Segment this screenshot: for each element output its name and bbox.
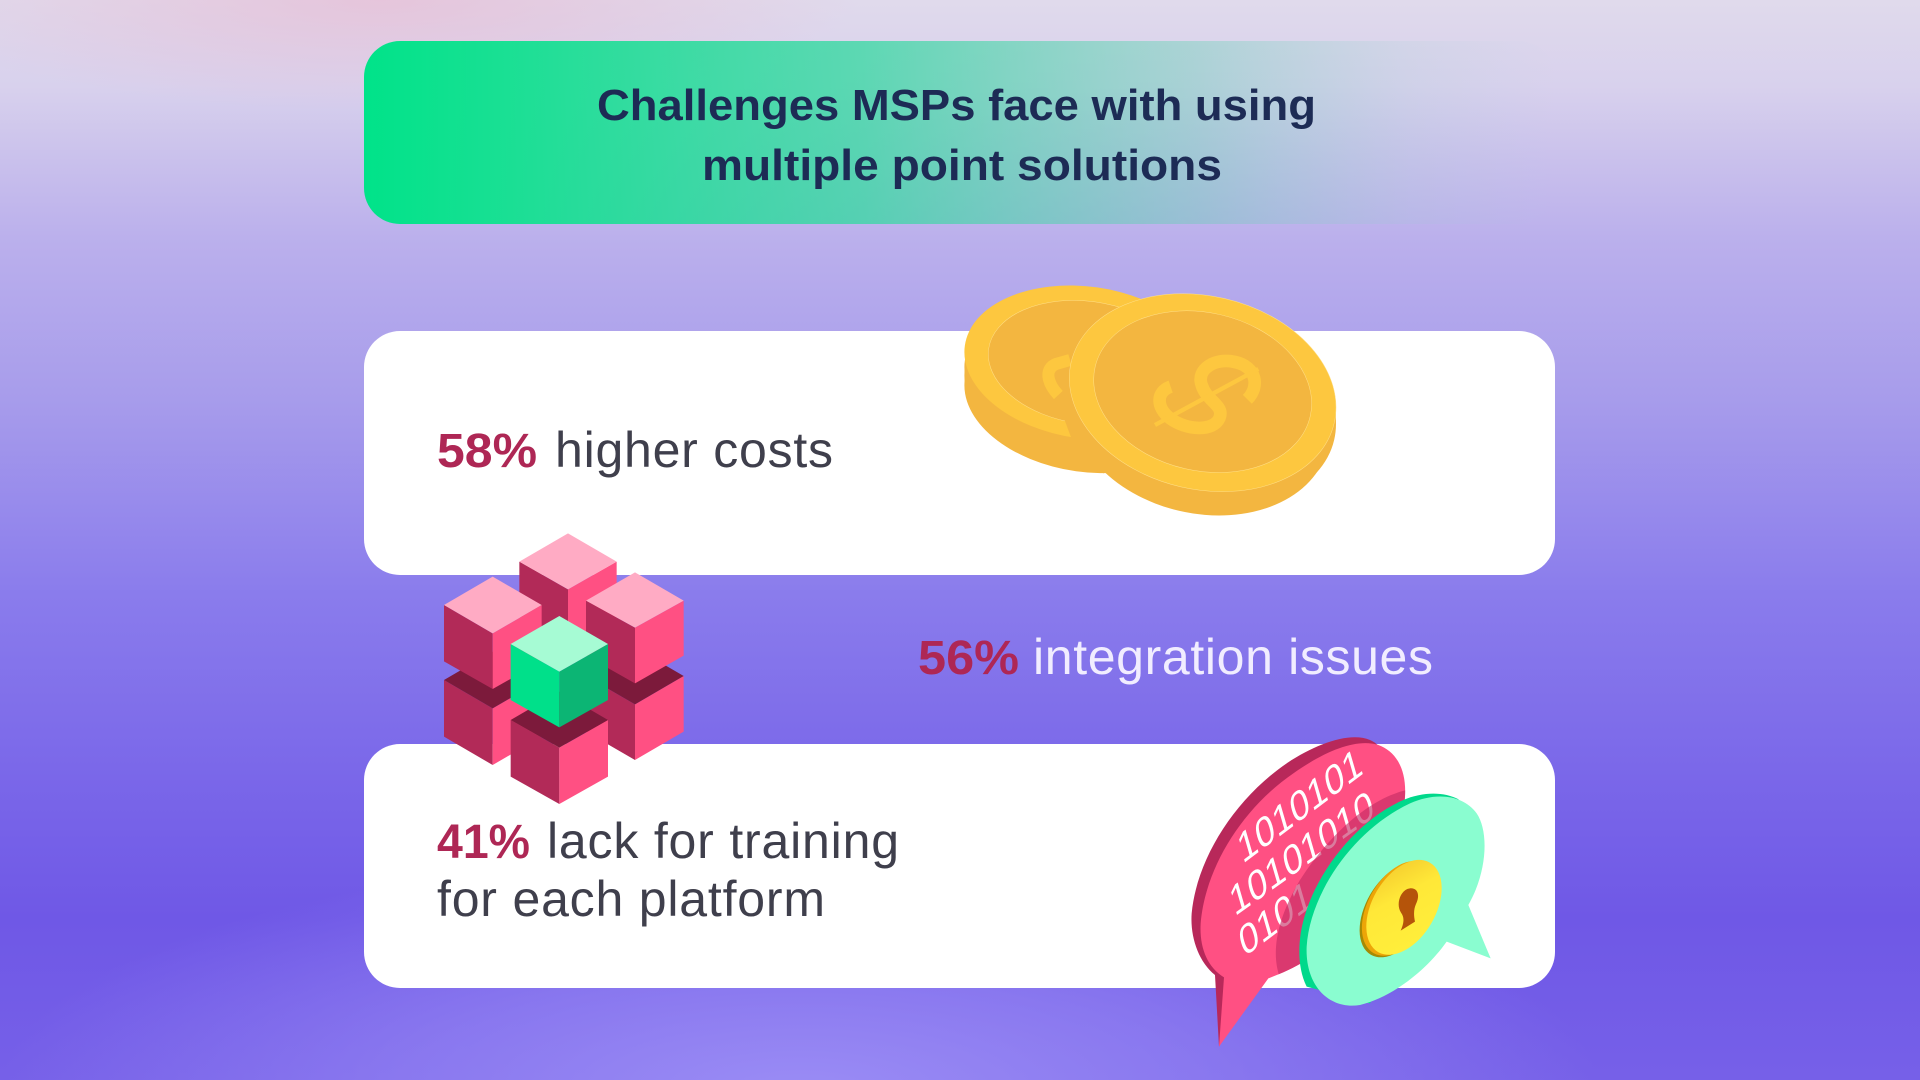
- stat text: 41% lack for training: 41%: [437, 816, 530, 869]
- lock coin: [1344, 847, 1457, 970]
- stat text: 41% lack for training: for each platform: [437, 871, 825, 927]
- lower right cube: [586, 648, 684, 760]
- title text: [597, 81, 1316, 190]
- banner panel: [364, 41, 1555, 224]
- green cube: [511, 616, 608, 727]
- upper right cube: [586, 572, 684, 683]
- green lock bubble: [1299, 794, 1491, 1006]
- stat text: 41% lack for training: lack for training: [547, 813, 899, 869]
- front coin: [1049, 268, 1356, 540]
- keyhole: [1399, 888, 1418, 931]
- icon: gold coins: [964, 286, 1336, 516]
- stat text: 41% lack for training: [437, 813, 899, 927]
- card: lack for training: [364, 744, 1555, 988]
- lower left cube: [444, 652, 542, 765]
- upper left cube: [444, 577, 542, 689]
- stat text: 58% higher costs: higher costs: [555, 422, 833, 478]
- title text: multiple point solutions: [702, 141, 1222, 190]
- lower center cube: [511, 692, 608, 804]
- stat text: 56% integration issues: integration issues: [1033, 629, 1433, 685]
- stat text: 58% higher costs: 58%: [437, 425, 537, 478]
- icon: speech bubbles with binary and lock: [1191, 737, 1491, 1047]
- title text: Challenges MSPs face with using: [597, 81, 1316, 130]
- binary digits: 1010101: [1233, 739, 1367, 873]
- icon: cube cluster: [444, 533, 684, 804]
- binary digits: 10101010: [1225, 782, 1379, 925]
- binary digits: 0101: [1234, 871, 1316, 966]
- dollar sign: [1155, 361, 1258, 428]
- card: higher costs: [364, 331, 1555, 575]
- back top cube: [519, 533, 617, 645]
- binary digits: [1231, 752, 1372, 953]
- back coin: [964, 286, 1142, 474]
- pink binary bubble: [1191, 737, 1410, 1047]
- title banner: [364, 41, 1555, 224]
- stat text: 56% integration issues: 56%: [918, 632, 1019, 685]
